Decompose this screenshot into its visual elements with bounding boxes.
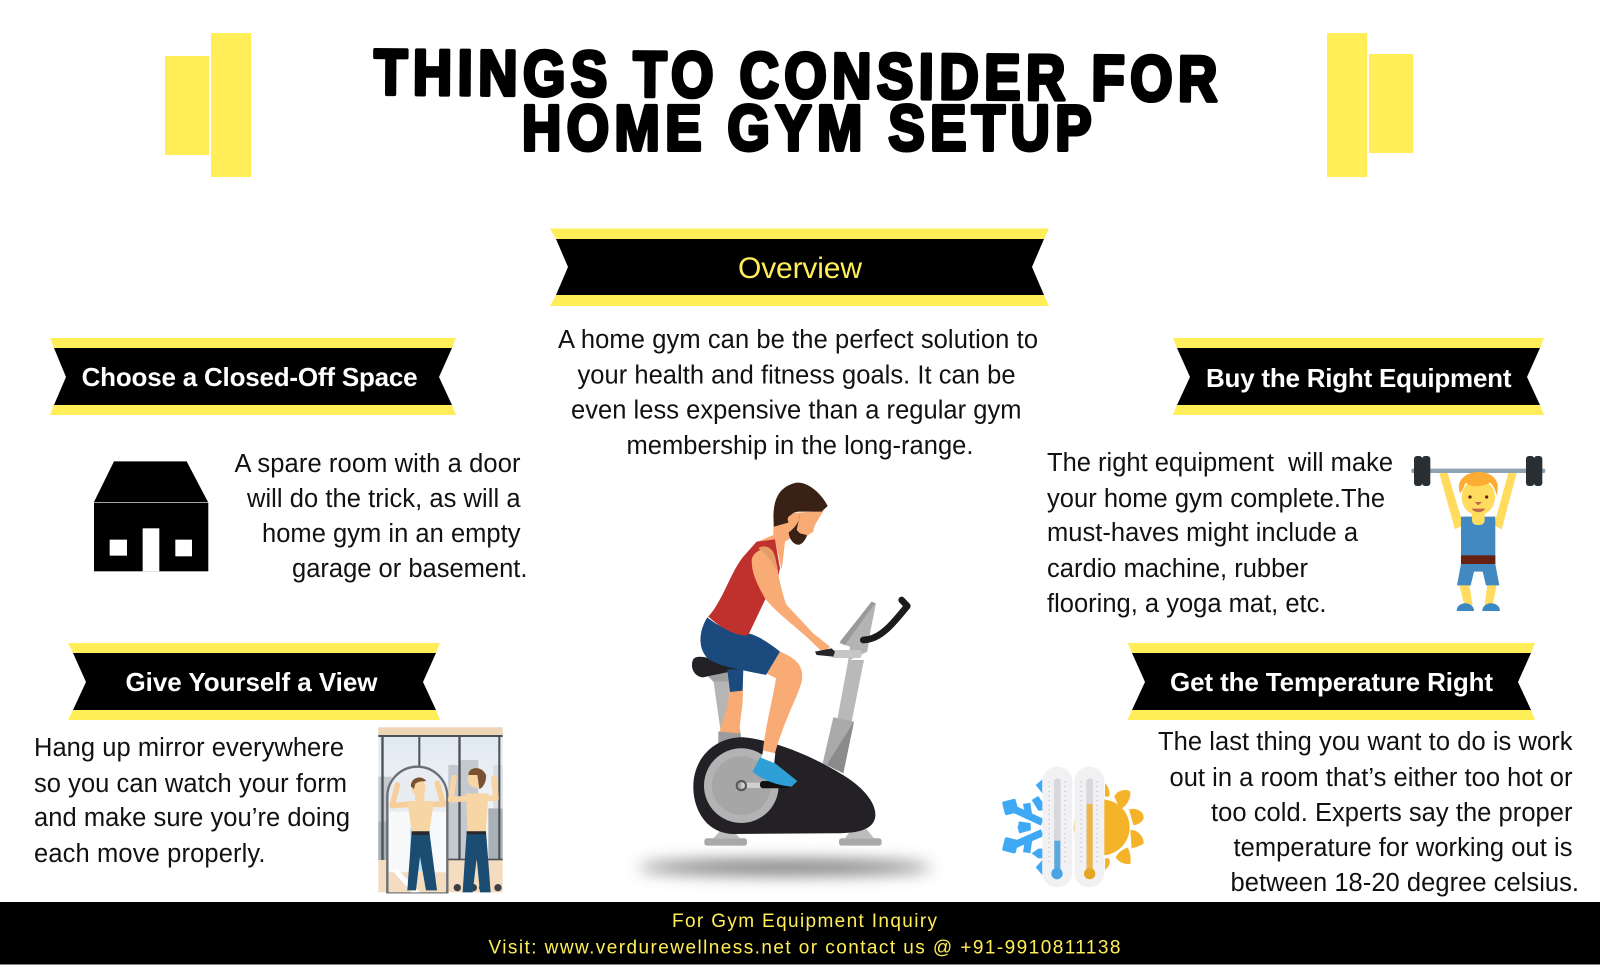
decoration: left yellow bars: [165, 33, 251, 177]
text: view paragraph: so you can watch your form: [34, 770, 347, 798]
text: closed-off space paragraph: A spare room with a door: [234, 450, 521, 478]
text: temperature paragraph: temperature for working out is: [1234, 834, 1572, 862]
title: [374, 36, 1218, 164]
banner: overview: Overview: [738, 252, 862, 285]
bike shadow: [638, 860, 932, 875]
text: overview paragraph: your health and fitness goals. It can be: [578, 362, 1016, 390]
banner: buy the right equipment: Buy the Right Equipment: [1206, 363, 1512, 393]
illustration: man flexing at mirror: [378, 727, 503, 892]
figure: man: [451, 768, 496, 892]
title: THINGS TO CONSIDER FOR: [374, 36, 1218, 115]
decoration: right yellow bars: [1327, 33, 1413, 177]
text: overview paragraph: A home gym can be the perfect solution to: [558, 326, 1038, 354]
banner: overview: [550, 228, 1049, 306]
text: closed-off space paragraph: garage or basement.: [292, 555, 528, 583]
bike frame: [692, 600, 907, 846]
icon: weightlifter: [1411, 456, 1545, 611]
text: temperature paragraph: out in a room that’s either too hot or: [1170, 764, 1573, 792]
text: view paragraph: and make sure you’re doing: [34, 804, 350, 832]
text: overview paragraph: even less expensive than a regular gym: [571, 396, 1022, 424]
banner: choose a closed-off space: Choose a Closed-Off Space: [82, 362, 418, 392]
text: temperature paragraph: too cold. Experts say the proper: [1211, 799, 1573, 827]
text: equipment paragraph: must-haves might include a: [1047, 519, 1359, 547]
illustration: man on exercise bike: [638, 483, 932, 875]
text: overview paragraph: [558, 326, 1038, 460]
text: equipment paragraph: [1047, 449, 1393, 618]
text: closed-off space paragraph: home gym in an empty: [262, 520, 521, 548]
text: temperature paragraph: [1158, 728, 1579, 897]
text: equipment paragraph: flooring, a yoga mat, etc.: [1047, 590, 1326, 618]
icon: thermometers with snowflake and sun: [1002, 767, 1144, 887]
figure: reflection: [392, 777, 443, 890]
banner: choose a closed-off space: [50, 338, 456, 415]
text: view paragraph: [34, 734, 350, 868]
banner: get the temperature right: Get the Temperature Right: [1170, 667, 1493, 697]
text: equipment paragraph: cardio machine, rubber: [1047, 555, 1308, 583]
text: closed-off space paragraph: [234, 450, 528, 583]
text: closed-off space paragraph: will do the trick, as will a: [246, 485, 521, 513]
cyclist: [700, 483, 835, 787]
banner: get the temperature right: [1128, 643, 1535, 720]
footer bar: Visit: www.verdurewellness.net or contact us @ +91-9910811138: [488, 938, 1120, 958]
title: HOME GYM SETUP: [522, 92, 1092, 164]
text: temperature paragraph: The last thing you want to do is work: [1158, 728, 1573, 756]
text: view paragraph: each move properly.: [34, 840, 266, 868]
text: temperature paragraph: between 18-20 degree celsius.: [1230, 869, 1579, 897]
text: view paragraph: Hang up mirror everywhere: [34, 734, 344, 762]
text: equipment paragraph: your home gym complete.The: [1047, 485, 1385, 513]
footer bar: For Gym Equipment Inquiry: [672, 911, 938, 932]
banner: give yourself a view: Give Yourself a View: [126, 667, 378, 697]
banner: buy the right equipment: [1173, 338, 1544, 415]
footer bar: [0, 902, 1600, 964]
text: equipment paragraph: The right equipment will make: [1047, 449, 1393, 477]
banner: give yourself a view: [68, 643, 440, 720]
text: overview paragraph: membership in the long-range.: [626, 432, 974, 460]
icon: house: [94, 461, 208, 571]
